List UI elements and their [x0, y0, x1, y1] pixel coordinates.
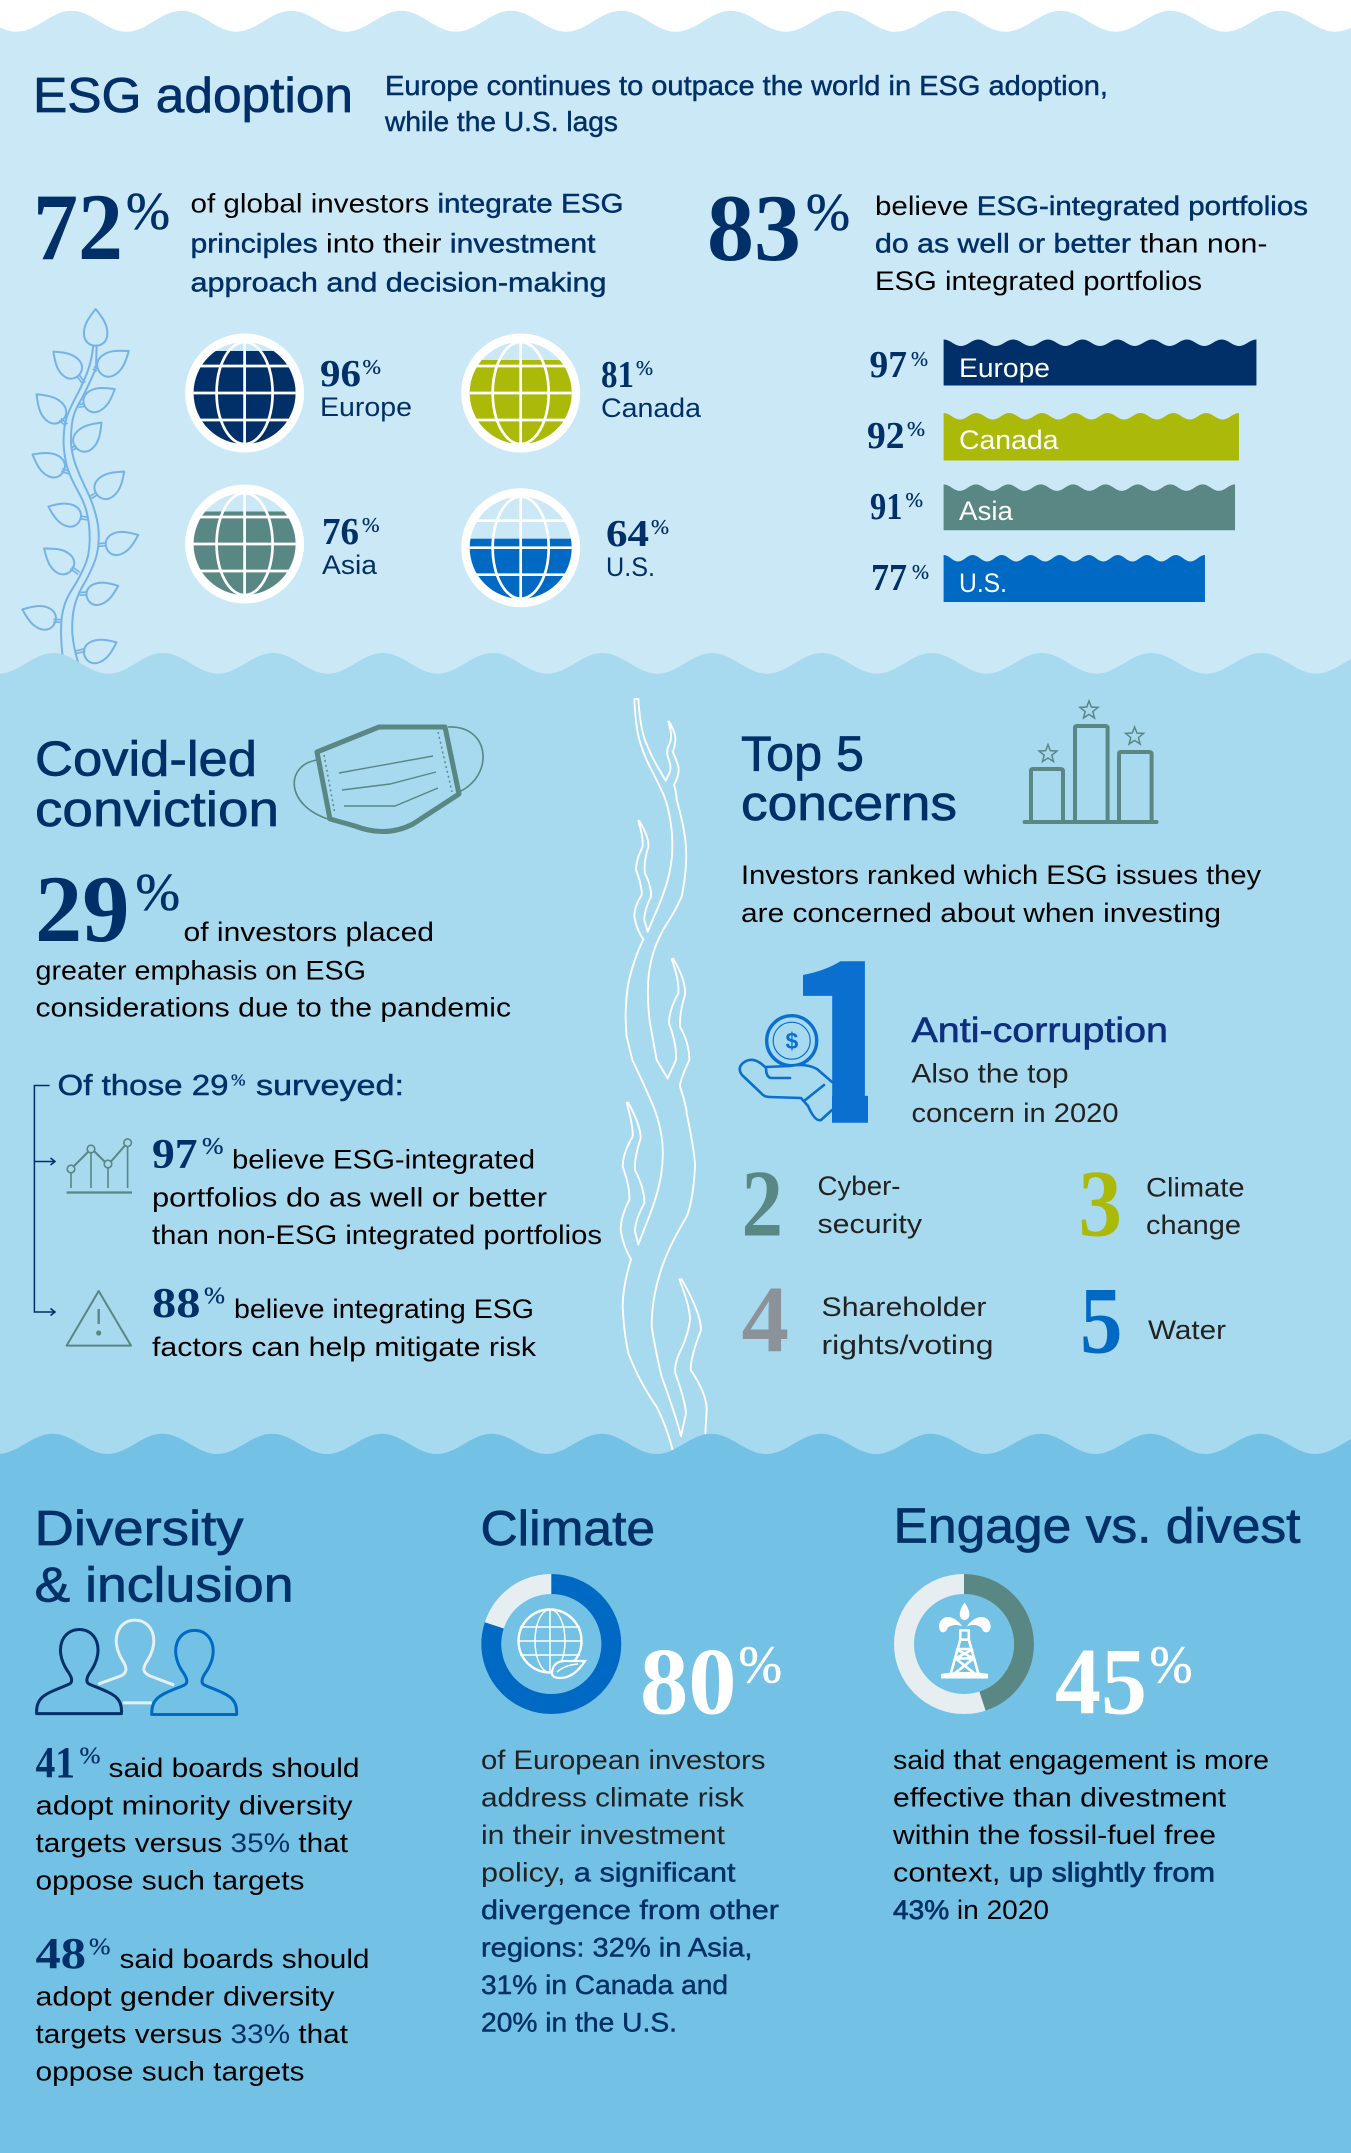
text: European investors climate policy: 31% in Canada and	[481, 1970, 728, 2000]
stat: 97 percent believe ESG-integrated: %	[202, 1134, 224, 1160]
arrow: bracket to the two sub-statistics	[34, 1086, 55, 1316]
stat: 72 percent of global investors: of global investors integrate ESG	[190, 188, 624, 218]
stat: 97 percent believe ESG-integrated: believe ESG-integrated	[232, 1144, 535, 1174]
stat: 72 percent of global investors: approach and decision-making	[190, 268, 606, 298]
stat: 83 percent believe	[707, 175, 1308, 296]
stat: 29 percent of investors: of investors placed	[184, 917, 434, 947]
globe: Asia 76 percent: 76	[322, 511, 359, 553]
bar: Canada 92 percent: Canada	[959, 425, 1060, 455]
rank 3: Climate change: 3	[1078, 1150, 1122, 1256]
globe: U.S. 64 percent: 64	[606, 513, 649, 555]
panel: ESG adoption	[33, 69, 1308, 607]
globe: Canada 81 percent: 81	[601, 354, 634, 396]
bar: Asia 91 percent	[870, 484, 1235, 530]
stat: 72 percent of global investors: %	[126, 183, 170, 241]
bar: Canada 92 percent: 92	[867, 415, 904, 457]
globe: Europe 96 percent: 96	[320, 353, 361, 395]
text: European investors climate policy	[481, 1745, 779, 2038]
bar: Asia 91 percent: 91	[870, 486, 902, 528]
stat: 48 percent gender diversity: oppose such targets	[36, 2056, 304, 2086]
bar: Europe 97 percent	[870, 340, 1256, 386]
globe: U.S. 64 percent: %	[651, 515, 669, 539]
rank 3: Climate change	[1078, 1150, 1244, 1256]
rank 1: Anti-corruption: Also the top	[912, 1058, 1068, 1088]
stat: 41 percent minority diversity: %	[80, 1744, 100, 1770]
stat: 45 percent: %	[1150, 1636, 1192, 1694]
stat: 48 percent gender diversity	[36, 1929, 370, 2086]
stat: 41 percent minority diversity	[36, 1738, 360, 1896]
stat: 83 percent believe: ESG integrated portfolios	[875, 266, 1202, 296]
rank 4: Shareholder rights/voting	[742, 1266, 994, 1372]
subheading: Of those 29 percent surveyed: surveyed:	[256, 1070, 404, 1102]
illustration: vine	[18, 309, 143, 667]
rank 5: Water: 5	[1080, 1268, 1122, 1374]
stat: 41 percent minority diversity: oppose such targets	[36, 1866, 304, 1896]
bar chart: regional belief in ESG portfolios	[867, 340, 1256, 602]
rank 2: Cyber-security: Cyber-	[818, 1171, 900, 1201]
globe: Canada 81 percent: %	[636, 356, 653, 380]
bar: U.S. 77 percent: %	[912, 560, 929, 584]
heading: Top 5 concerns: Top 5	[741, 728, 864, 782]
globe: Asia 76 percent: %	[362, 513, 380, 537]
heading: Covid-led conviction: conviction	[35, 783, 279, 837]
bar: Canada 92 percent: %	[907, 417, 925, 441]
stat: 83 percent believe: 83	[707, 175, 801, 281]
stat: 88 percent believe integrating: %	[204, 1284, 225, 1310]
text: European investors climate policy: of European investors	[481, 1745, 766, 1775]
heading: Covid-led conviction: Covid-led	[35, 732, 257, 786]
subheading: while the U.S. lags	[384, 106, 618, 137]
globe: Canada 81 percent: Canada	[601, 393, 702, 423]
stat: 72 percent of global investors: 72	[33, 174, 123, 280]
stat: 97 percent believe ESG-integrated: portfolios do as well or better	[152, 1182, 547, 1212]
icon: oil derrick	[939, 1602, 991, 1679]
heading: Diversity & inclusion: Diversity	[34, 1502, 244, 1556]
subheading: Europe continues to outpace the world in ESG adoption,	[385, 70, 1108, 101]
rank 4: Shareholder rights/voting: Shareholder	[822, 1292, 987, 1322]
stat: 48 percent gender diversity: said boards should	[120, 1944, 370, 1974]
globe: U.S. 64 percent	[461, 488, 669, 607]
bar: Europe 97 percent: %	[911, 347, 928, 371]
stat: 80 percent	[640, 1628, 782, 1734]
panel: Climate	[480, 1502, 782, 2038]
stat: 97 percent believe ESG-integrated	[152, 1132, 602, 1250]
stat: 29 percent of investors: %	[136, 864, 180, 922]
stat: 88 percent believe integrating: 88	[152, 1281, 200, 1327]
subheading	[384, 70, 1108, 137]
stat: 48 percent gender diversity: targets versus 33% that	[36, 2019, 349, 2049]
globe: Europe 96 percent: Europe	[320, 392, 412, 422]
heading: Climate: Climate	[480, 1502, 655, 1556]
bar: U.S. 77 percent: 77	[871, 557, 907, 599]
heading: Top 5 concerns: concerns	[741, 777, 957, 831]
stat: 80 percent: %	[738, 1636, 782, 1694]
globe: Europe 96 percent: %	[362, 355, 381, 379]
icon: globe with leaf	[518, 1610, 585, 1678]
stat: 83 percent believe: do as well or better than non-	[875, 228, 1268, 258]
stat: 29 percent of investors: 29	[35, 856, 130, 962]
stat: 41 percent minority diversity: targets versus 35% that	[36, 1828, 349, 1858]
rank 2: Cyber-security	[742, 1150, 923, 1256]
heading: Diversity & inclusion	[34, 1502, 294, 1612]
intro text	[741, 860, 1262, 928]
icon: hand holding coin: $	[786, 1028, 798, 1054]
stat: 48 percent gender diversity: adopt gender diversity	[36, 1982, 335, 2012]
icon: three people	[37, 1620, 237, 1715]
heading: Diversity & inclusion: & inclusion	[34, 1558, 294, 1612]
bar: Europe 97 percent: 97	[870, 344, 907, 386]
icon: line chart	[67, 1139, 132, 1192]
rank 2: Cyber-security: 2	[742, 1150, 783, 1256]
text: European investors climate policy: 20% in the U.S.	[481, 2008, 677, 2038]
stat: 45 percent	[1055, 1628, 1192, 1734]
subheading: Of those 29 percent surveyed: %	[231, 1070, 246, 1090]
icon: warning triangle	[67, 1291, 131, 1346]
bar: Canada 92 percent	[867, 413, 1239, 460]
text: engagement vs divestment: context, up slightly from	[893, 1858, 1215, 1888]
intro text: Investors ranked which ESG issues they	[741, 860, 1262, 890]
panel: Top 5 concerns	[740, 701, 1262, 1374]
stat: 29 percent of investors: considerations due to the pandemic	[36, 992, 511, 1022]
heading: ESG adoption: ESG adoption	[33, 69, 353, 123]
section background: ESG adoption	[0, 11, 1351, 700]
rank 4: Shareholder rights/voting: rights/voting	[822, 1330, 994, 1360]
stat: 88 percent believe integrating: factors can help mitigate risk	[152, 1332, 537, 1362]
rank 4: Shareholder rights/voting: 4	[742, 1266, 789, 1372]
stat: 48 percent gender diversity: 48	[36, 1929, 86, 1978]
stat: 45 percent: 45	[1055, 1628, 1147, 1734]
bar: Europe 97 percent: Europe	[959, 353, 1050, 383]
text: European investors climate policy: divergence from other	[481, 1895, 779, 1925]
rank 5: Water	[1080, 1268, 1226, 1374]
stat: 97 percent believe ESG-integrated: 97	[152, 1132, 198, 1178]
text: engagement vs divestment: effective than divestment	[893, 1782, 1227, 1812]
subheading: Of those 29 percent surveyed: Of those 29	[58, 1070, 228, 1102]
stat: 41 percent minority diversity: 41	[36, 1738, 75, 1787]
panel: Covid-led conviction	[34, 727, 602, 1362]
globe: Canada 81 percent	[461, 334, 702, 452]
text: engagement vs divestment: 43% in 2020	[893, 1895, 1049, 1925]
rank 5: Water: Water	[1148, 1315, 1226, 1345]
section background: Covid-led conviction and Top 5 concerns	[0, 653, 1351, 1480]
stat: 48 percent gender diversity: %	[89, 1934, 110, 1960]
text: European investors climate policy: regions: 32% in Asia,	[481, 1932, 752, 1962]
stat: 72 percent of global investors	[33, 174, 624, 298]
donut chart: 45 percent	[904, 1584, 1024, 1704]
section background: Diversity, Climate and Engage	[0, 1434, 1351, 2153]
text: European investors climate policy: policy, a significant	[481, 1858, 736, 1888]
bar: Asia 91 percent: %	[906, 488, 923, 512]
rank 2: Cyber-security: security	[818, 1209, 923, 1239]
bar: U.S. 77 percent: U.S.	[959, 568, 1007, 598]
rank 1: Anti-corruption	[912, 1011, 1168, 1128]
stat: 88 percent believe integrating	[152, 1281, 537, 1362]
subheading: Of those 29 percent surveyed	[58, 1070, 404, 1102]
stat: 83 percent believe: %	[806, 184, 850, 242]
stat: 41 percent minority diversity: said boards should	[108, 1753, 360, 1783]
intro text: are concerned about when investing	[741, 898, 1221, 928]
text: engagement vs divestment	[892, 1745, 1269, 1925]
bar: Asia 91 percent: Asia	[959, 496, 1014, 526]
stat: 29 percent of investors: greater emphasis on ESG	[36, 956, 366, 986]
bar: U.S. 77 percent	[871, 555, 1205, 602]
stat: 83 percent believe: believe ESG-integrated portfolios	[875, 191, 1308, 221]
text: European investors climate policy: in their investment	[481, 1820, 726, 1850]
stat: 72 percent of global investors: principles into their investment	[190, 228, 596, 258]
globe: Asia 76 percent	[185, 484, 380, 604]
decorative seaweed illustration	[621, 699, 707, 1450]
text: European investors climate policy: address climate risk	[481, 1782, 745, 1812]
stat: 97 percent believe ESG-integrated: than non-ESG integrated portfolios	[152, 1220, 602, 1250]
heading: Engage vs. divest: Engage vs. divest	[894, 1500, 1301, 1554]
text: engagement vs divestment: said that engagement is more	[893, 1745, 1269, 1775]
rank 1: Anti-corruption: Anti-corruption	[912, 1011, 1168, 1050]
stat: 80 percent: 80	[640, 1628, 736, 1734]
heading: Covid-led conviction	[35, 732, 279, 837]
stat: 41 percent minority diversity: adopt minority diversity	[36, 1790, 353, 1820]
panel: Engage vs. divest	[892, 1500, 1301, 1925]
donut chart: 80 percent	[491, 1584, 611, 1704]
globe: U.S. 64 percent: U.S.	[606, 552, 655, 582]
icon: face mask	[294, 727, 483, 832]
icon: podium with stars	[1025, 701, 1157, 822]
globe: Europe 96 percent	[185, 334, 412, 452]
icon: hand holding coin	[740, 1016, 832, 1120]
stat: 29 percent of investors	[35, 856, 511, 1022]
rank 3: Climate change: Climate	[1146, 1172, 1244, 1202]
stat: 88 percent believe integrating: believe integrating ESG	[234, 1294, 534, 1324]
globe: Asia 76 percent: Asia	[322, 550, 378, 580]
text: engagement vs divestment: within the fossil-fuel free	[892, 1820, 1216, 1850]
rank 3: Climate change: change	[1146, 1210, 1241, 1240]
rank 1: Anti-corruption: concern in 2020	[912, 1098, 1118, 1128]
rank 1: numeral: 1	[778, 863, 910, 1188]
heading: Top 5 concerns	[741, 728, 957, 831]
panel: Diversity and inclusion	[34, 1502, 370, 2086]
